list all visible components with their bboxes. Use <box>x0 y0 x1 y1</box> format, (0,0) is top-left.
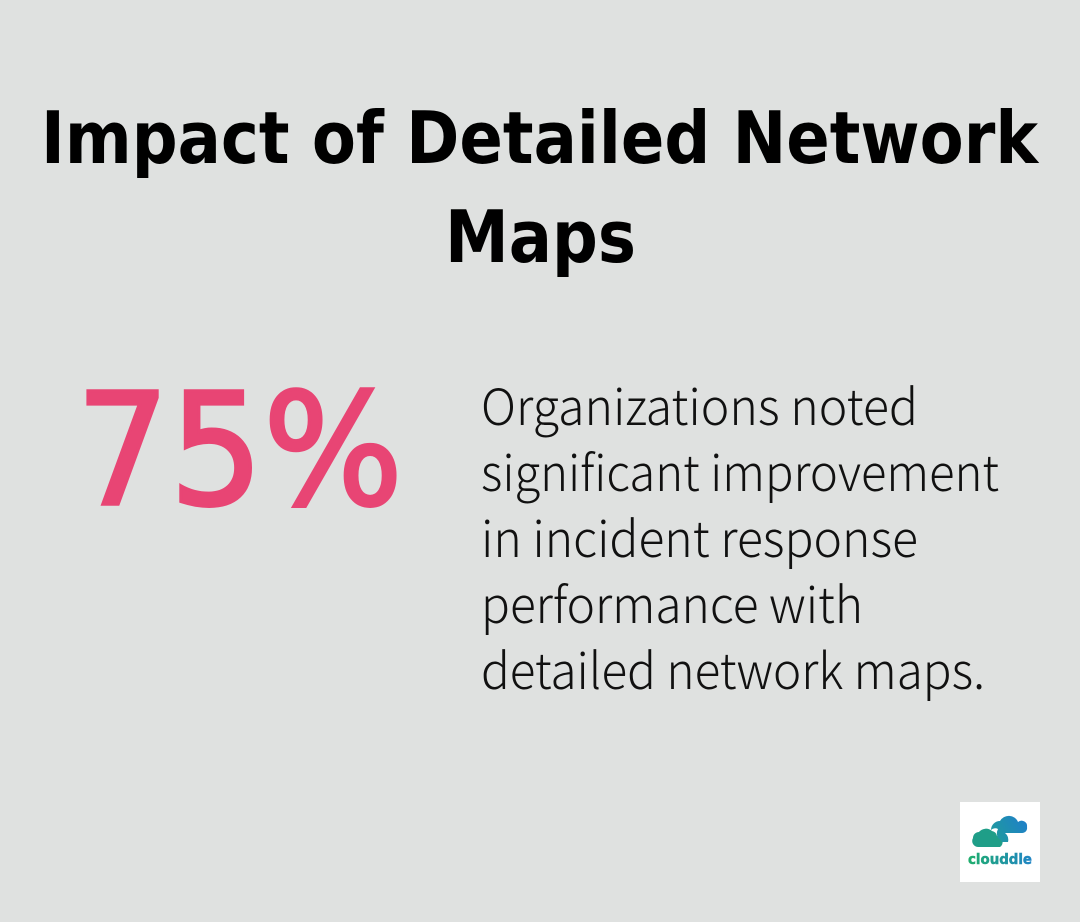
description text: in incident response <box>481 500 918 572</box>
description text: performance with <box>481 566 863 638</box>
description text: detailed network maps. <box>481 632 985 704</box>
description text: significant improvement <box>481 434 999 506</box>
logo wordmark: clouddle <box>968 852 1032 868</box>
title: Maps <box>445 195 636 279</box>
icon: left cloud <box>972 829 1003 847</box>
description text <box>481 368 999 704</box>
logo background <box>960 802 1040 882</box>
description text: Organizations noted <box>481 368 918 440</box>
icon: right cloud <box>991 816 1027 842</box>
big statistic: 75%: 75% <box>76 360 403 541</box>
title <box>41 96 1040 279</box>
logo: clouddle <box>960 802 1040 882</box>
